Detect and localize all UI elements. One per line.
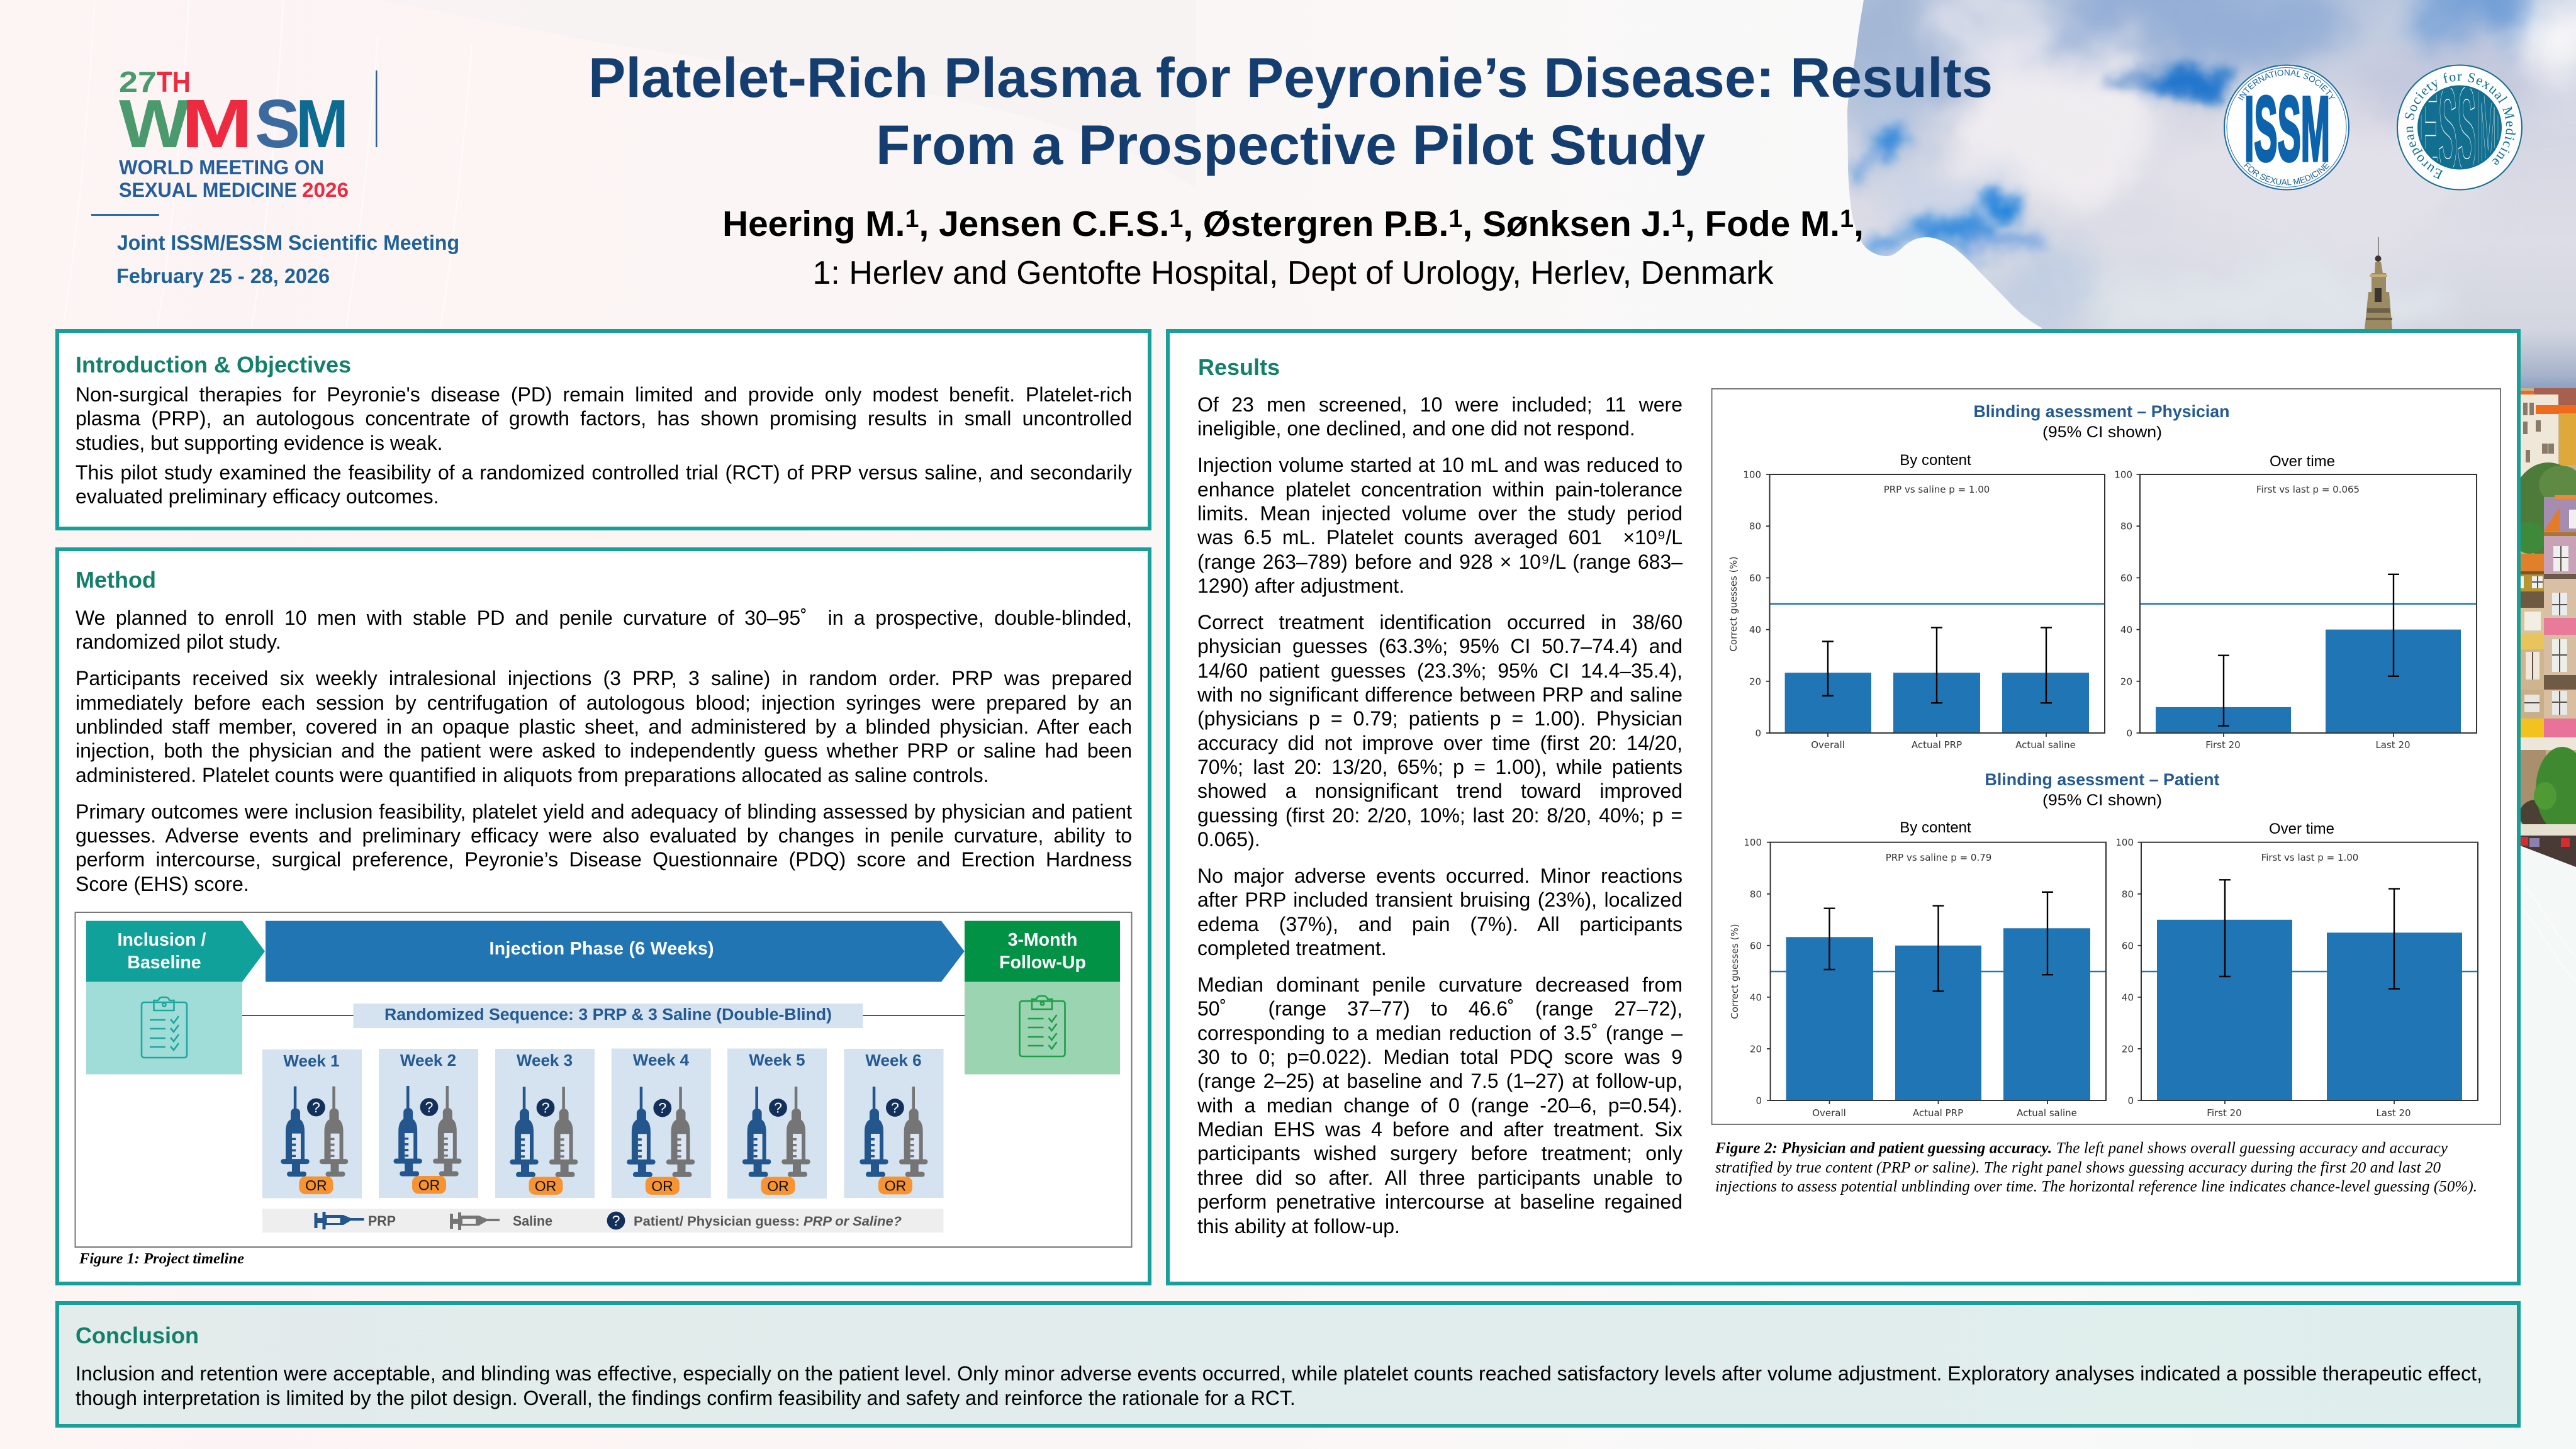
bar chart: physician by content [1728, 452, 2105, 751]
bar chart: physician by content: 40 [1749, 624, 1761, 635]
text block: results: limits. Mean injected volume over the study period [1197, 502, 1683, 525]
phase: inclusion / baseline: Inclusion / [118, 930, 206, 950]
text block: results: participants wished surgery before treatment; only [1197, 1142, 1683, 1165]
text block: method: injection, both the physician and the patient were asked to independently guess whether PRP or saline had been [76, 739, 1132, 762]
title: From a Prospective Pilot Study [876, 113, 1705, 176]
bar chart: physician over time: Last 20 [2375, 739, 2411, 751]
week 1: OR [305, 1177, 327, 1194]
bar chart: patient by content [1729, 819, 2106, 1119]
text block: results: corresponding to a median reduction of 3.5˚ (range – [1197, 1022, 1683, 1044]
bar chart: patient by content: Overall [1812, 1107, 1846, 1119]
week 1 [262, 1049, 362, 1198]
text block: results: 0.065). [1197, 828, 1260, 851]
bar chart: patient by content: 0 [1756, 1095, 1762, 1106]
text block: results: Median dominant penile curvature decreased from [1197, 973, 1683, 996]
legend: Patient/ Physician guess: PRP or Saline? [634, 1214, 902, 1229]
text block: method: Primary outcomes were inclusion feasibility, platelet yield and adequacy of blinding assessed by physician and patient [76, 800, 1132, 823]
text block: results: (range 2–25) at baseline and 7.5 (1–27) at follow-up, [1197, 1070, 1683, 1092]
text block: results: guessing (first 20: 2/20, 10%; last 20: 8/20, 40%; p = [1197, 804, 1683, 827]
bar chart: physician over time: 0 [2126, 727, 2132, 739]
week 2: Week 2 [400, 1051, 456, 1070]
text block: conclusion [76, 1362, 2484, 1411]
text block: method [76, 607, 1132, 895]
heading: introduction: Introduction & Objectives [76, 352, 351, 378]
week 3: OR [535, 1178, 556, 1194]
text block: conclusion: though interpretation is limited by the pilot design. Overall, the findings confirm feasibility and safety and reinforce the rationale for a RCT. [76, 1387, 1296, 1409]
phase: 3-month follow-up: 3-Month [1008, 930, 1077, 950]
ESSM seal: European Society for Sexual Medicine [2405, 73, 2516, 180]
WMSM wordmark: M [181, 86, 253, 162]
text block: introduction: plasma (PRP), an autologous concentrate of growth factors, has shown promising results in small uncontrolled [76, 407, 1132, 430]
bar chart: patient over time: 20 [2122, 1043, 2134, 1055]
logo: ISSM and ESSM societies [2224, 64, 2523, 190]
bar chart: physician over time: First vs last p = 0.065 [2256, 484, 2360, 495]
text block: results: after PRP included transient bruising (23%), localized [1197, 888, 1683, 911]
bar chart: patient over time: 80 [2122, 888, 2134, 900]
bar chart: patient by content: PRP vs saline p = 0.79 [1886, 852, 1991, 863]
bar chart: physician over time: 40 [2120, 624, 2132, 635]
chart heading: patient: (95% CI shown) [2042, 792, 2162, 809]
text block: method: administered. Platelet counts were quantified in aliquots from preparations allocated as saline controls. [76, 764, 988, 786]
bar chart: physician by content: Actual saline [2015, 739, 2076, 751]
text block: conclusion: Inclusion and retention were acceptable, and blinding was effective, especially on the patient level. Only minor adverse events occurred, while platelet counts reached satisfactory levels after volume adjustment. Exploratory analyses indicated a possible therapeutic effect, [76, 1362, 2482, 1385]
bar chart: physician by content: 80 [1749, 521, 1761, 532]
27TH mark: TH [157, 65, 191, 98]
caption: figure 2: Figure 2: Physician and patient guessing accuracy. The left panel shows overall guessing accuracy and accuracy [1715, 1140, 2448, 1157]
bar chart: patient by content: Actual PRP [1913, 1107, 1963, 1119]
week 4 [612, 1048, 711, 1198]
legend [262, 1209, 943, 1233]
figure 2: blinding assessment charts [1711, 388, 2501, 1125]
text block: method: randomized pilot study. [76, 630, 281, 653]
bar chart: patient by content: 80 [1750, 888, 1762, 900]
page background with sky and Porto cityscape [1847, 0, 2576, 867]
week 6: OR [885, 1178, 906, 1194]
text block: results: accuracy did not improve over time (first 20: 14/20, [1197, 732, 1683, 754]
randomized sequence band [242, 1004, 965, 1028]
bar chart: physician over time: 100 [2114, 469, 2132, 481]
phase: 3-month follow-up [965, 921, 1120, 1075]
week 4: Week 4 [633, 1051, 690, 1070]
figure 1: project timeline [74, 912, 1133, 1248]
authors: Heering M.1, Jensen C.F.S.1, Østergren P.B.1, Sønksen J.1, Fode M.1, [722, 204, 1864, 244]
panel: method [55, 547, 1151, 1285]
heading: method: Method [76, 567, 156, 593]
panel: results [1166, 329, 2521, 1285]
chart heading: patient: Blinding asessment – Patient [1985, 770, 2220, 789]
phase: injection phase arrow: Injection Phase (6 Weeks) [490, 939, 714, 959]
bar chart: patient over time: Last 20 [2376, 1107, 2411, 1119]
bar chart: patient over time: 60 [2122, 940, 2134, 951]
ISSM seal: INTERNATIONAL SOCIETY [2237, 69, 2336, 101]
text block: results: (range 263–789) before and 928 × 10⁹/L (range 683– [1197, 551, 1683, 573]
week 3 [495, 1049, 595, 1198]
bar chart: patient over time: First vs last p = 1.00 [2261, 852, 2358, 863]
bar chart: patient by content: Actual saline [2017, 1107, 2077, 1119]
text block: method: We planned to enroll 10 men with stable PD and penile curvature of 30–95˚ in a prospective, double-blinded, [76, 607, 1132, 629]
phase: injection phase arrow [266, 921, 965, 982]
text block: results: showed a nonsignificant trend toward improved [1197, 780, 1683, 802]
week 3: Week 3 [517, 1051, 573, 1070]
ISSM seal [2224, 64, 2349, 190]
week 6: Week 6 [865, 1051, 922, 1070]
legend: Saline [513, 1213, 552, 1229]
legend: PRP [368, 1213, 396, 1229]
icon: church tower [2365, 237, 2392, 330]
affiliation: 1: Herlev and Gentofte Hospital, Dept of Urology, Herlev, Denmark [813, 255, 1773, 291]
caption: figure 2: stratified by true content (PRP or saline). The right panel shows guessing accuracy during the first 20 and last 20 [1715, 1159, 2441, 1177]
text block: results: with a median change of 0 (range -20–6, p=0.54). [1197, 1094, 1683, 1117]
bar chart: patient over time [2115, 820, 2478, 1119]
phase: inclusion / baseline: Baseline [127, 953, 201, 973]
bar chart: patient over time: 100 [2115, 837, 2134, 848]
text block: results: (physicians p = 0.79; patients p = 1.00). Physician [1197, 707, 1683, 730]
bar chart: physician by content: Actual PRP [1912, 739, 1962, 751]
panel: introduction and objectives [55, 329, 1151, 530]
bar chart: physician by content: PRP vs saline p = 1.00 [1884, 484, 1990, 495]
text block: method: immediately before each session by centrifugation of autologous blood; injection syringes were prepared by an [76, 691, 1132, 714]
bar chart: physician by content: Overall [1811, 739, 1845, 751]
text block: introduction: studies, but supporting evidence is weak. [76, 432, 442, 454]
ISSM seal: FOR SEXUAL MEDICINE [2244, 162, 2329, 185]
logo: 27th WMSM conference [91, 65, 459, 288]
week 6 [844, 1049, 944, 1198]
text block: results: ineligible, one declined, and one did not respond. [1197, 417, 1635, 440]
chart heading: physician: Blinding asessment – Physician [1973, 402, 2230, 421]
phase: 3-month follow-up: Follow-Up [999, 953, 1086, 973]
week 5: Week 5 [749, 1051, 805, 1070]
week 2: OR [418, 1177, 440, 1193]
text block: introduction [76, 383, 1132, 508]
phase: inclusion / baseline [86, 921, 265, 1075]
heading: conclusion: Conclusion [76, 1323, 199, 1348]
text block: method: Participants received six weekly intralesional injections (3 PRP, 3 saline) in random order. PRP was prepared [76, 667, 1132, 690]
chart heading: patient [1985, 770, 2220, 809]
week 1: Week 1 [283, 1051, 340, 1070]
text block: method: perform intercourse, surgical preference, Peyronie’s Disease Questionnaire (PDQ) score and Erection Hardness [76, 848, 1132, 871]
bar chart: physician over time: First 20 [2205, 739, 2241, 751]
meeting name [119, 156, 349, 201]
bar chart: physician over time [2114, 453, 2477, 751]
meeting name: 2026 [302, 179, 349, 201]
text block: method: unblinded staff member, covered in an opaque plastic sheet, and administered by a blinded physician. After each [76, 715, 1132, 738]
joint meeting and dates: February 25 - 28, 2026 [116, 264, 330, 288]
week 4: OR [651, 1178, 673, 1194]
text block: results: completed treatment. [1197, 937, 1387, 959]
text block: results: No major adverse events occurred. Minor reactions [1197, 864, 1683, 887]
title: Platelet-Rich Plasma for Peyronie’s Disease: Results [588, 46, 1993, 109]
text block: results: 14/60 patient guesses (23.3%; 95% CI 14.4–35.4), [1197, 659, 1683, 682]
text block: results: 70%; last 20: 13/20, 65%; p = 1.00), while patients [1197, 756, 1683, 778]
week 5 [727, 1048, 827, 1199]
bar chart: patient over time: Over time [2269, 820, 2334, 837]
bar chart: physician over time: 80 [2120, 521, 2132, 532]
bar chart: patient by content: 40 [1750, 992, 1762, 1003]
cityscape strip on right edge [2511, 388, 2576, 867]
text block: results: Of 23 men screened, 10 were included; 11 were [1197, 393, 1683, 416]
text block: results: three did so after. All three participants unable to [1197, 1166, 1683, 1189]
text block: results: Correct treatment identification occurred in 38/60 [1197, 611, 1683, 634]
text block: results: this ability at follow-up. [1197, 1214, 1400, 1237]
bar chart: physician over time: 60 [2120, 573, 2132, 584]
text block: results: Injection volume started at 10 mL and was reduced to [1197, 454, 1683, 476]
text block: results [1197, 393, 1683, 1237]
text block: results: edema (37%), and pain (7%). All participants [1197, 913, 1683, 936]
panel: conclusion [55, 1301, 2521, 1428]
joint meeting and dates [116, 231, 459, 288]
bar chart: patient over time: 40 [2122, 992, 2134, 1003]
bar chart: patient by content: By content [1900, 819, 1971, 836]
text block: results: enhance platelet concentration within pain-tolerance [1197, 478, 1683, 501]
WMSM wordmark [119, 86, 349, 162]
bar chart: physician over time: Over time [2270, 453, 2335, 470]
text block: results: 1290) after adjustment. [1197, 574, 1404, 597]
bar chart: patient by content: Correct guesses (%) [1729, 924, 1740, 1019]
WMSM wordmark: W [119, 86, 189, 162]
caption: figure 1: Figure 1: Project timeline [79, 1250, 244, 1267]
27TH mark [119, 65, 191, 98]
WMSM wordmark: M [296, 86, 349, 162]
text block: method: Score (EHS) score. [76, 873, 249, 895]
bar chart: patient over time: 0 [2127, 1095, 2134, 1106]
text block: results: 30 to 0; p=0.022). Median total PDQ score was 9 [1197, 1046, 1683, 1068]
bar chart: physician by content: 100 [1743, 469, 1761, 481]
text block: introduction: Non-surgical therapies for Peyronie's disease (PD) remain limited and provide only modest benefit. Platelet-rich [76, 383, 1132, 406]
bar chart: physician by content: By content [1900, 452, 1971, 469]
text block: results: perform penetrative intercourse at baseline regained [1197, 1190, 1683, 1213]
caption: figure 2: injections to assess potential unblinding over time. The horizontal reference line indicates chance-level guessing (50%). [1715, 1178, 2477, 1195]
text block: results: physician guesses (63.3%; 95% CI 50.7–74.4) and [1197, 635, 1683, 657]
bar chart: physician by content: 60 [1749, 573, 1761, 584]
bar chart: patient by content: 20 [1750, 1043, 1762, 1055]
week 2 [379, 1049, 478, 1198]
logo: ISSM and ESSM societies: ISSM [2244, 77, 2330, 180]
bar chart: patient over time: First 20 [2207, 1107, 2242, 1119]
bar chart: physician by content: 0 [1755, 727, 1761, 739]
text block: results: with no significant difference between PRP and saline [1197, 683, 1683, 706]
randomized sequence band: Randomized Sequence: 3 PRP & 3 Saline (Double-Blind) [384, 1006, 832, 1024]
text block: results: Median EHS was 4 before and after treatment. Six [1197, 1118, 1683, 1141]
joint meeting and dates: Joint ISSM/ESSM Scientific Meeting [117, 231, 459, 254]
title [588, 46, 1993, 176]
WMSM wordmark: S [255, 86, 300, 162]
week 5: OR [767, 1178, 789, 1194]
bar chart: physician by content: 20 [1749, 676, 1761, 687]
bar chart: physician by content: Correct guesses (%) [1728, 556, 1739, 652]
bar chart: patient by content: 60 [1750, 940, 1762, 951]
meeting name: WORLD MEETING ON [119, 156, 324, 179]
text block: method: guesses. Adverse events and preliminary efficacy were also evaluated by changes in penile curvature, ability to [76, 824, 1132, 847]
text block: results: was 6.5 mL. Platelet counts averaged 601 ×10⁹/L [1197, 526, 1683, 549]
bar chart: patient by content: 100 [1744, 837, 1762, 848]
text block: introduction: evaluated preliminary efficacy outcomes. [76, 485, 439, 508]
chart heading: physician: (95% CI shown) [2042, 423, 2162, 441]
meeting name: SEXUAL MEDICINE [119, 179, 297, 201]
27TH mark: 27 [119, 65, 157, 98]
text block: results: 50˚ (range 37–77) to 46.6˚ (range 27–72), [1197, 997, 1683, 1020]
heading: results: Results [1198, 354, 1280, 380]
text block: introduction: This pilot study examined the feasibility of a randomized controlled trial (RCT) of PRP versus saline, and secondarily [76, 461, 1132, 484]
bar chart: physician over time: 20 [2120, 676, 2132, 687]
caption: figure 2 [1715, 1140, 2477, 1195]
chart heading: physician [1973, 402, 2230, 441]
